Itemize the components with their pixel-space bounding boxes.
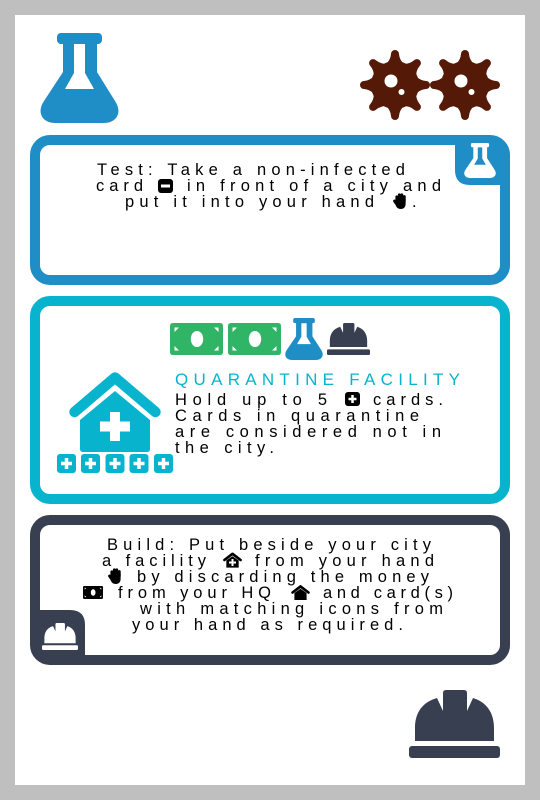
build description text: your hand as required. bbox=[132, 616, 403, 634]
build description text: and card(s) bbox=[323, 584, 453, 602]
icon: quarantine building bbox=[74, 378, 156, 452]
build description text: from your HQ bbox=[118, 584, 271, 602]
facility description text: the city. bbox=[175, 439, 274, 457]
test description text: Test: Take a non-infected bbox=[97, 161, 405, 179]
icon: large helmet bbox=[409, 690, 500, 758]
facility description text: are considered not in bbox=[175, 423, 441, 441]
icon: two brown gears bbox=[360, 50, 500, 120]
test description text: put it into your hand bbox=[125, 193, 374, 211]
build description text: by discarding the money bbox=[137, 568, 430, 586]
helmet corner badge bbox=[35, 610, 85, 660]
test description text: . bbox=[412, 193, 417, 211]
icon: row of five cards bbox=[57, 454, 173, 473]
flask corner badge bbox=[455, 140, 505, 185]
facility description text: cards. bbox=[373, 391, 443, 409]
cost icons: money, flask, helmet bbox=[170, 318, 370, 360]
panel: quarantine facility bbox=[35, 301, 505, 499]
panel: test action bbox=[35, 140, 505, 280]
facility description text bbox=[175, 391, 443, 457]
build description text bbox=[83, 536, 453, 634]
facility heading: QUARANTINE FACILITY bbox=[175, 370, 460, 389]
build description text: from your hand bbox=[255, 552, 434, 570]
icon: large flask bbox=[41, 33, 118, 123]
panel: build action bbox=[35, 520, 505, 660]
facility description text: Hold up to 5 bbox=[175, 391, 327, 409]
build description text: a facility bbox=[102, 552, 207, 570]
build description text: with matching icons from bbox=[139, 600, 443, 618]
test description text: card bbox=[96, 177, 143, 195]
build description text: Build: Put beside your city bbox=[107, 536, 432, 554]
test description text: in front of a city and bbox=[187, 177, 441, 195]
test description text bbox=[96, 161, 441, 211]
facility description text: Cards in quarantine bbox=[175, 407, 419, 425]
